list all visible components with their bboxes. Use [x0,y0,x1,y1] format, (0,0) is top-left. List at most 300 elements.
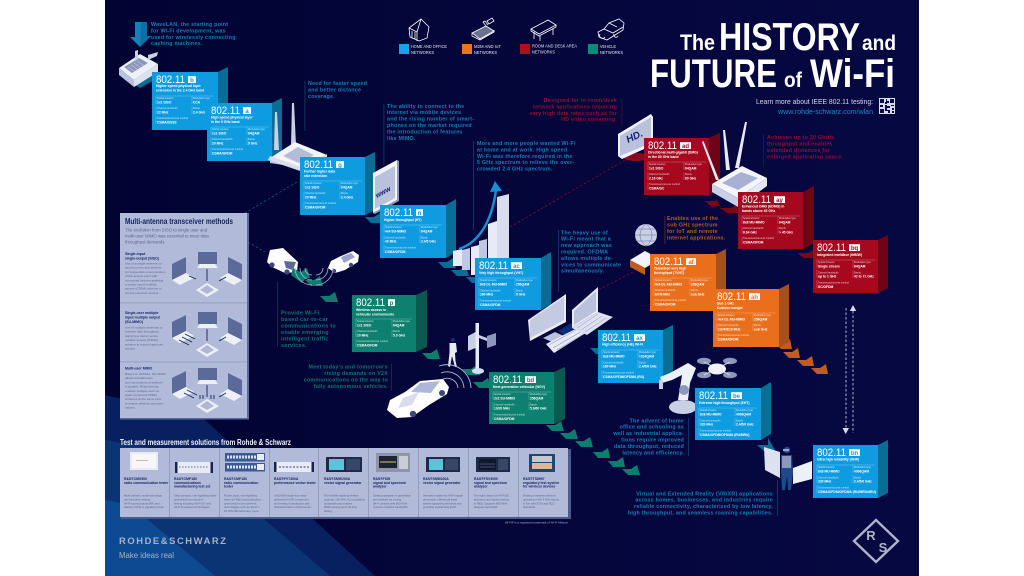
product: fsv3000: analyzer [474,485,488,489]
description [356,308,394,316]
product: pvt360a [274,462,317,509]
specifications: 256QAM [691,282,704,286]
product: fsv3000: spectrum and signal analysis [474,498,510,502]
specifications: CSMA/OFDM [655,303,676,307]
card: 802.11p [352,290,427,352]
section text: mu-mimo: to ensure efficient communi- [125,401,164,405]
annotation: faster speed [305,81,367,131]
heading: test and measurement: Test and measurement solutions from Rohde & Schwarz [120,438,291,447]
product: cmp180 manufacturing: Wi-Fi 8 wireless technologies. [174,505,211,509]
specifications: Modulation type [736,409,754,412]
annotation: ofdma: required. OFDMA [561,250,608,256]
specifications: 2.4/5/6 GHz [854,480,872,484]
specifications: Bands [754,324,762,327]
icon: r&s logo: R [866,528,876,543]
section text: mu-mimo: schemes at the same time [125,397,161,401]
specifications: Bands [854,271,862,274]
specifications: 20 MHz [305,196,317,200]
annotation: room desk: Designed for in-room/desk [544,98,617,104]
specifications: 320 MHz [700,423,714,427]
section text: mu-mimo: communications of stations [125,380,163,384]
section text: siso [125,252,166,295]
product: fsw: real time analysis bandwidth. [373,505,409,509]
standard name: 802.11 [699,390,728,402]
annotation: v2x: fully autonomous vehicles. [314,384,388,390]
specifications [817,465,876,494]
annotation: ofdma: allows multiple de- [561,256,613,262]
standard name: 802.11 [817,242,846,254]
section text: siso: access (CSMA) scheme to [125,287,162,291]
description: Integrated mmWave (IMMW) [817,253,862,257]
description: Custom manget [717,306,743,310]
specifications: Modulation type [854,261,872,264]
annotation: 20 gbit [763,134,843,167]
specifications: 64QAM [854,264,866,268]
specifications: Transmission/access method [649,183,681,186]
annotation: 20 gbit: Achieves up to 20 Gbit/s [767,135,834,141]
brand wordmark: Make ideas real [119,551,174,560]
product: pvt360a: and testing in production and [274,501,310,505]
product: cmp180 radio: tester [224,485,234,489]
annotation: wavelan: cashing machines. [151,41,203,47]
annotation: v2x [304,364,392,391]
specifications: Bands [639,361,647,364]
product: smm100a: vector signal generator [423,481,461,485]
title: of [784,69,803,92]
annotation: v2x: rising demands on V2X [324,371,388,377]
icon: car [328,251,359,273]
specifications [699,408,757,437]
product: cmx500: R&S®CMX500 [124,477,147,481]
specifications: Spatial streams [494,393,511,396]
product: smw200a: MIMO testing and real time [324,505,357,509]
title: Wi-Fi [810,52,895,96]
learn more text and url [756,97,873,116]
standard name: 802.11 [817,447,846,459]
annotation: ofdma: new approach was [561,243,612,249]
title: HISTORY [719,16,860,59]
specifications: 5.9 GHz [393,334,405,338]
specifications: Channel bandwidth [818,476,839,479]
diagram: su-mimo [172,312,242,357]
card: 802.11n [380,199,456,258]
specifications: Transmission/access method [818,487,850,490]
annotation: faster speed: and better distance [308,87,361,93]
specifications: Modulation type [639,351,657,354]
product: cmx500: test bed when testing [124,498,150,502]
specifications: 8x8 MU-MIMO [818,469,840,473]
specifications: Spatial streams [718,314,735,317]
specifications: Transmission/access method [480,300,512,303]
key: home and office [399,44,447,55]
specifications: Bands [516,289,524,292]
specifications: Spatial streams [700,409,717,412]
specifications: > 45 GHz [779,231,793,235]
annotation: home office [612,418,688,456]
description [648,150,698,159]
product: fsv3000: The right choice for Wi-Fi 6E [474,494,509,498]
section text: mu-mimo: allows simultaneous [125,376,153,380]
specifications [304,181,362,210]
product: pvt360a: characterization environments. [274,505,312,509]
diagram: mu-mimo [172,368,242,413]
standard name: 802.11 [384,207,413,219]
standard name: ax [636,336,643,342]
specifications: CSMA/SC [649,187,665,191]
product: fsw: Setting standards in generation [373,494,412,498]
key: vehicle: NETWORKS [600,50,623,55]
key: room and desk area: ROOM AND DESK AREA [532,44,577,48]
specifications: Transmission/access method [212,148,244,151]
icon: drone [697,358,737,378]
legend: network types [399,18,624,55]
specifications: 64QAM [421,229,433,233]
section text: mu-mimo: Based on OFDMA, MU-MIMO [125,372,167,376]
standard name: 802.11 [648,140,677,152]
annotation: 5 ghz: at home and at work. High speed [477,147,567,153]
annotation: 5 ghz: 5 GHz spectrum to relieve the over- [477,160,574,166]
key: m2m and iot [462,44,501,55]
specifications: CSMA/OFDM/OFDMA (RU/MRU/dRU) [818,490,876,494]
specifications [384,225,442,254]
description: Wireless access in [356,308,386,312]
specifications: 8.64 GHz [743,231,757,235]
specifications [211,127,269,156]
icon: hd monitor [618,114,653,161]
product: ts8997: for wireless devices [523,485,555,489]
specifications: 4x4 DL-MU-MIMO [718,317,746,321]
specifications: 2x2 SU-MIMO [494,396,516,400]
card: 802.11af [650,249,726,311]
standard name: bd [527,378,534,384]
specifications: 64QAM [248,131,260,135]
product: fsw: R&S®FSW [373,477,391,481]
product: fsv3000: analysis bandwidth. [474,505,498,509]
key: m2m and iot: NETWORKS [474,50,497,55]
product: cmp180 radio: radio communication [224,481,258,485]
annotation: mimo [384,104,474,165]
description: rate extension [304,174,327,178]
section text: su-mimo: Use of multiple antennas to [125,326,163,330]
description: High speed physical layer [211,116,253,120]
section text: mu-mimo: in parallel. Beamforming [125,385,159,389]
annotation: 20 gbit: throughput and enables [767,142,833,148]
specifications: Bands [193,107,201,110]
description [156,84,204,92]
specifications: Spatial streams [385,226,402,229]
product: cmp180 radio: tester for R&D and production, [224,498,261,502]
card: 802.11ad [644,133,720,195]
chevrons: orange [775,339,828,374]
chevrons: blue and red [365,198,815,452]
annotation: car to car: services. [281,343,307,349]
key: m2m and iot: M2M AND IoT [474,44,501,49]
section text: siso: Use of a single antenna on [125,262,162,266]
section text: siso: connected devices applying [125,278,163,282]
specifications: Spatial streams [305,182,322,185]
product: pvt360a: performance vector tester [274,481,317,485]
specifications: Transmission/access method [718,334,750,337]
specifications: Transmission/access method [655,299,687,302]
specifications: Spatial streams [655,279,672,282]
specifications: Channel bandwidth [718,324,739,327]
product: cmp180 manufacturing: optimized for production [174,498,204,502]
description: bands above 45 GHz [742,209,775,213]
standard name: 802.11 [742,194,771,206]
annotation: vr xr: high throughput, and seamless roaming capabilities. [628,510,773,516]
specifications: Spatial streams [357,320,374,323]
product: smm100a: providing outstanding EVM. [423,505,457,509]
specifications: Channel bandwidth [494,403,515,406]
annotation: v2x: communications on the way to [304,378,389,384]
specifications: Bands [691,289,699,292]
description [742,204,784,213]
description [211,116,253,124]
specifications: Spatial streams [603,351,620,354]
specifications: Channel bandwidth [700,419,721,422]
specifications: CSMA/OFDM [494,417,515,421]
specifications: Transmission/access method [818,282,850,285]
key: home and office: NETWORKS [411,50,434,55]
specifications: 5.9/60 GHz [530,407,547,411]
standard name: ac [513,264,520,270]
product: fsw: analyzer [373,485,387,489]
product: cmx500: stations (STA) in signaling mode. [124,505,164,509]
specifications: Modulation type [393,320,411,323]
section text: siso: single-output (SISO) [125,256,159,260]
specifications: 8x8 MU-MIMO [743,220,765,224]
annotation: home office: well as industrial applica- [612,431,684,437]
specifications: CSMA/OFDM/OFDMA (RU/MRU) [700,433,750,437]
brand wordmark: ROHDE&SCHWARZ [119,535,226,546]
specifications: 5 GHz [248,142,258,146]
specifications: Transmission/access method [305,202,337,205]
description: in the 5 GHz band [211,120,240,124]
key: vehicle: VEHICLE [600,44,616,49]
specifications: Channel bandwidth [655,289,676,292]
product: smw200a: bandwidth and enables [324,501,353,505]
standard name: 802.11 [493,374,522,386]
specifications [742,216,800,245]
specifications: Modulation type [685,163,703,166]
icon: cash register [119,50,158,88]
specifications: 320 MHz [818,480,832,484]
key: room and desk area: NETWORKS [532,50,555,54]
product: cmx500 [124,452,169,509]
specifications: 40 MHz [385,240,397,244]
specifications: 1/2/4/8/16 MHz [718,328,741,332]
annotation: vr xr: Virtual and Extended Reality (VR/XR) applications [636,491,773,497]
product: cmp180 manufacturing: Ultra compact, non-signaling tester [174,494,217,498]
annotation: faster speed: Need for faster speed [308,81,367,87]
annotation: mimo: the introduction of features [387,129,463,135]
annotation: car to car: enable emerging [281,330,329,336]
specifications: Bands [341,192,349,195]
description: extension in the 2.4 GHz band [156,88,204,92]
section text: mu-mimo [125,366,167,410]
product: cmp180 manufacturing: manufacturing test set [174,485,211,489]
annotation: wavelan [151,22,236,47]
product: cmx500: Wi-Fi access points (AP) and [124,501,160,505]
annotation: ofdma [558,230,621,292]
annotation: ofdma: The heavy use of [561,230,608,236]
specifications [356,319,412,348]
specifications: 256QAM [754,317,767,321]
description [654,266,686,275]
icon: router with two antennas [268,103,327,172]
product: smm100a: generation, offering all band [423,498,458,502]
icon: van [267,248,298,275]
specifications: Modulation type [530,393,548,396]
description: Further higher data [304,170,335,174]
title: The [680,30,715,55]
dashed connectors [245,160,633,290]
product: fsw [373,453,412,509]
section text: su-mimo: (SU-MIMO) [125,320,143,324]
specifications: Transmission/access method [357,340,389,343]
specifications: Bands [779,227,787,230]
product: fsv3000: R&S®FSV3000 [474,477,498,481]
description: Enhanced DMG (EDMG) in [742,204,784,208]
specifications: CSMA/OFDM [718,338,739,342]
specifications: 2.16 GHz [649,177,663,181]
specifications: Spatial streams [743,217,760,220]
description: Higher throughput (HT) [384,218,421,222]
standard name: bq [851,246,858,252]
annotation: car to car [277,282,336,349]
annotation: home office: office and schooling as [620,425,684,431]
icon: robot arm [659,363,697,414]
specifications: Transmission/access method [743,237,775,240]
specifications [648,162,706,191]
specifications: 4x4 DL-MU-MIMO [655,282,683,286]
chevrons: teal [292,268,640,475]
standard name: be [733,394,741,400]
card: 802.11ac [475,252,551,310]
section text: siso: of the access point with [125,274,157,278]
specifications: Spatial streams [480,279,497,282]
specifications: Modulation type [754,314,772,317]
annotation: 5 ghz [473,141,576,230]
annotation: mimo: internet via mobile devices [387,110,461,116]
specifications: 42 to 71 GHz [854,275,874,279]
standard name: 802.11 [654,256,683,268]
product: fsv3000 [474,457,510,509]
card: 802.11a [207,98,282,161]
specifications: Modulation type [248,128,266,131]
product: cmp180 manufacturing: R&S®CMP180 [174,477,197,481]
icon: signal waves between cars [291,268,333,285]
specifications: 8x8 MU-MIMO [700,412,722,416]
specifications: Channel bandwidth [157,107,178,110]
annotation: 20 gbit: extended distances for [767,148,830,154]
annotation: room desk [529,98,622,125]
specifications [717,313,775,342]
specifications: CSMA/OFDM [305,206,326,210]
specifications: 1x1 SISO [357,323,372,327]
section text: mu-mimo: Multi-user MIMO [125,366,152,370]
specifications: 1024QAM [639,354,654,358]
icon: signal waves from car [439,365,471,388]
annotation: vr xr [628,480,778,516]
specifications: 256QAM [530,396,543,400]
product: cmp180 radio: optimized for next wireless [224,501,257,505]
specifications: 160 MHz [480,293,494,297]
card: 802.11ay [738,186,814,249]
annotation: sub ghz: sub GHz spectrum [667,222,718,228]
specifications: Modulation type [341,182,359,185]
specifications: Channel bandwidth [212,138,233,141]
standard name: p [390,301,394,307]
icon: blue down arrow [130,22,151,47]
specifications: Spatial streams [212,128,229,131]
specifications [156,96,214,125]
specifications: Bands [421,236,429,239]
specifications [479,278,537,307]
panel: test and measurement products [120,448,571,519]
panel heading: Multi-antenna transceiver methods [125,216,233,226]
annotation: car to car: based car-to-car [281,317,329,323]
icon: www tablet [373,160,399,214]
specifications: Bands [854,476,862,479]
specifications: Channel bandwidth [480,289,501,292]
annotation: v2x: Meet today's and tomorrow's [309,365,388,371]
section text: su-mimo: scheme to control spectrum [125,342,163,346]
annotation: sub ghz: internet applications. [667,236,726,242]
specifications: Bands [248,138,256,141]
annotation: sub ghz [665,216,726,244]
specifications: 4096QAM [854,469,869,473]
description: vehicular environments [356,312,394,316]
card: 802.11bq [813,235,888,293]
specifications: Bands [685,173,693,176]
annotation: car to car: Provide Wi-Fi [281,310,320,316]
specifications: 2.4/5 GHz [421,240,436,244]
specifications: CSMA/OFDM [743,241,764,245]
specifications: 60 GHz [685,177,697,181]
learn more text and url: Learn more about IEEE 802.11 testing: [756,97,873,106]
standard name: 802.11 [356,297,385,309]
annotation: room desk: HD video streaming. [561,117,617,123]
specifications: up to 1 GHz [818,275,837,279]
specifications [654,278,712,307]
specifications: Modulation type [193,97,211,100]
annotation: mimo: phones on the market required [387,123,472,129]
specifications: Spatial streams [818,466,835,469]
specifications: CSMA/OFDM [357,344,378,348]
standard name: 802.11 [717,291,746,303]
annotation: faster speed: coverage. [308,94,335,100]
product: cmp180 radio: Future proof, non-signaling [224,494,257,498]
specifications: CCK [193,100,201,104]
standard name: b [190,78,194,84]
annotation: home office: data throughput, reduced [614,444,684,450]
specifications: Single stream [818,264,840,268]
specifications: SC/OFDM [818,285,833,289]
specifications: 2.4 GHz [341,196,353,200]
product: ts8997: R&S®TS8997 [523,477,545,481]
specifications: 8x8 MU-MIMO [603,354,625,358]
product: pvt360a: R&S®PVT360A [274,477,299,481]
specifications: 10/20 MHz [494,407,510,411]
specifications: Channel bandwidth [305,192,326,195]
icon: r&s logo [854,520,898,562]
diagram: siso [172,252,242,297]
specifications: sub GHz [754,328,768,332]
specifications: 6/7/8 MHz [655,293,670,297]
specifications: 1x1 SISO [157,100,172,104]
section text: su-mimo: applying a carrier sense [125,334,158,338]
